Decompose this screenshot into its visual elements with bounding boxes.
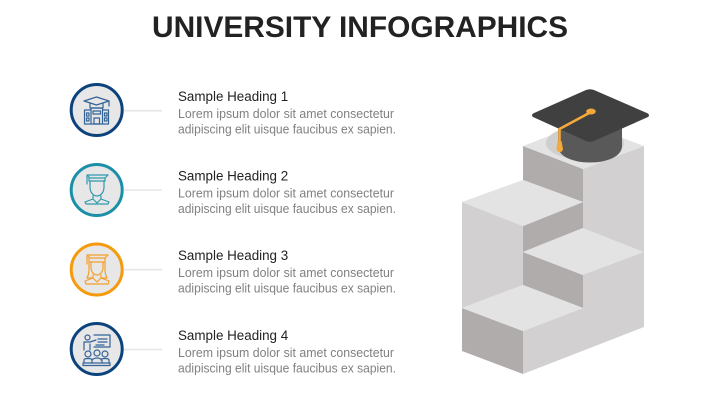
text block 2: Lorem ipsum dolor sit amet consectetur [178,186,394,200]
title: UNIVERSITY INFOGRAPHICS [152,11,568,44]
isometric staircase [462,123,644,374]
icon: female graduate [71,244,122,295]
heading 4: Sample Heading 4 [178,328,289,343]
item 1 [71,84,396,136]
item 1: adipiscing elit uisque faucibus ex sapien. [178,122,396,136]
item 2 [71,164,396,216]
item 4: adipiscing elit uisque faucibus ex sapien. [178,362,396,376]
text block 1: Lorem ipsum dolor sit amet consectetur [178,107,394,121]
item 2: adipiscing elit uisque faucibus ex sapien. [178,202,396,216]
heading 3: Sample Heading 3 [178,248,288,263]
icon: graduation cap [532,89,649,162]
icon: male graduate [71,164,122,216]
item 3: adipiscing elit uisque faucibus ex sapien. [178,282,396,296]
icon: university building [71,84,122,136]
text block 4: Lorem ipsum dolor sit amet consectetur [178,346,394,360]
text block 3: Lorem ipsum dolor sit amet consectetur [178,266,394,280]
item 4 [71,324,396,376]
icon: lecture class [71,324,122,374]
item 3 [71,244,396,296]
heading 2: Sample Heading 2 [178,168,288,184]
heading 1: Sample Heading 1 [178,89,288,104]
